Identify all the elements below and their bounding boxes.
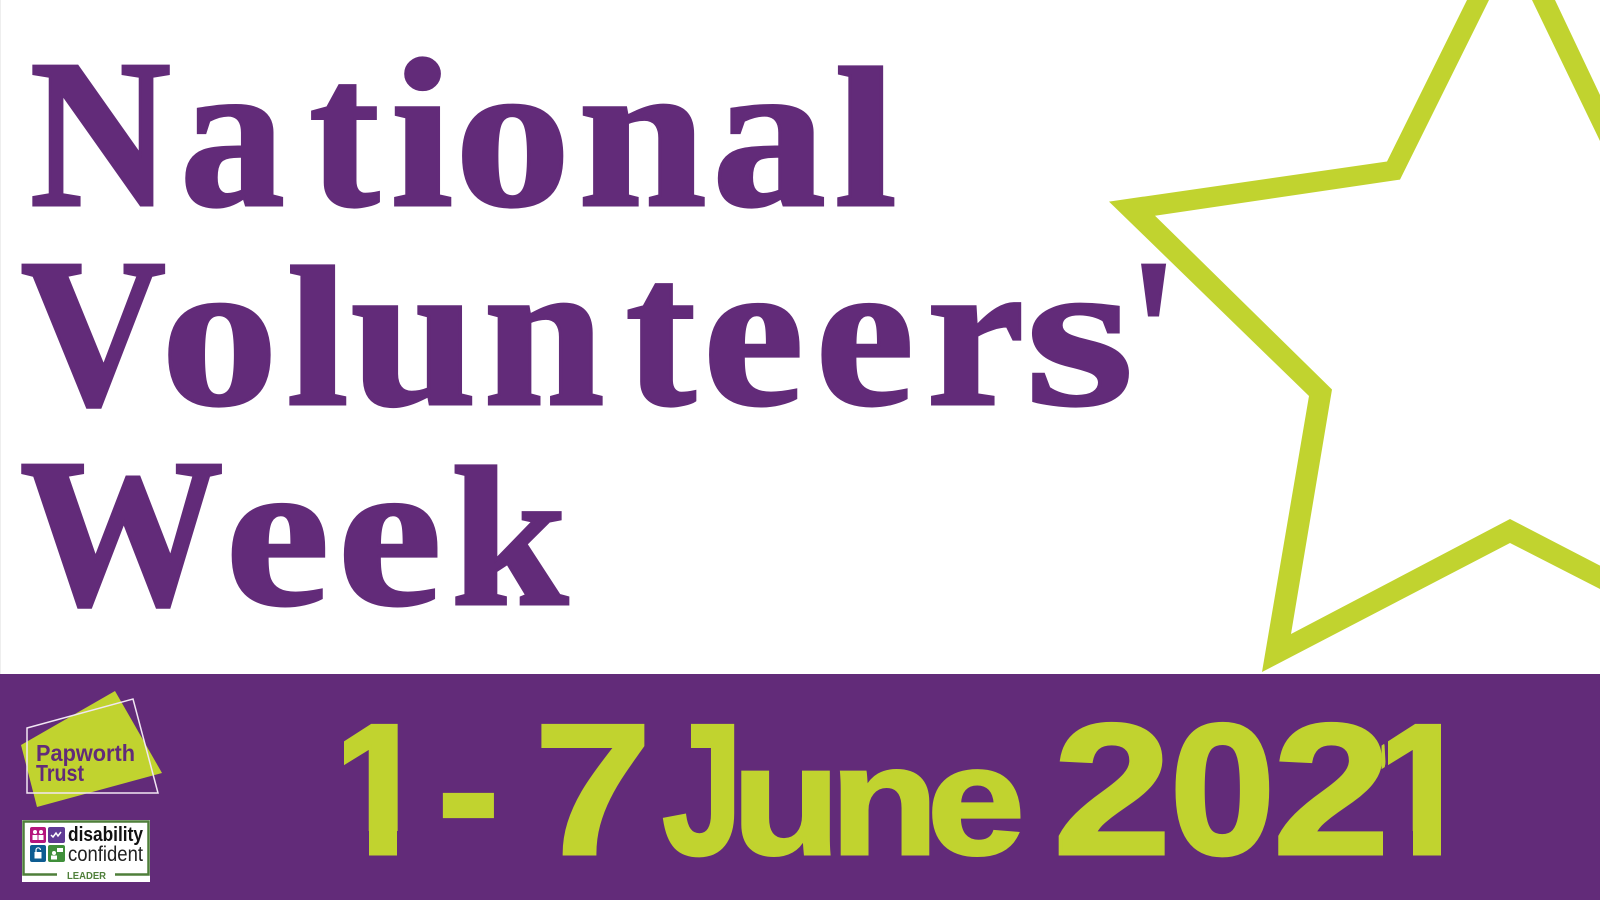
purple date banner bbox=[0, 674, 1600, 900]
title line: Volunteers': u bbox=[351, 215, 477, 450]
title line: Volunteers': e bbox=[703, 215, 804, 450]
title line: National: o bbox=[455, 16, 570, 251]
date part: June: J bbox=[662, 685, 743, 894]
title line: National: n bbox=[578, 16, 707, 251]
title line: National: i bbox=[391, 16, 453, 251]
title line: Volunteers': V bbox=[21, 215, 166, 450]
badge text: confident: confident bbox=[68, 843, 143, 866]
icon: outlined lime star bbox=[1109, 0, 1600, 672]
date part: 1 - 7: 7 bbox=[534, 685, 652, 894]
date part: June: n bbox=[830, 714, 939, 887]
date part: June: e bbox=[927, 714, 1025, 887]
date part: 2021: 2 bbox=[1053, 685, 1172, 894]
title: National Volunteers' Week bbox=[20, 16, 1178, 650]
icon: ticks bbox=[48, 827, 65, 843]
title line: Volunteers': t bbox=[626, 215, 696, 450]
title line: National: a bbox=[712, 16, 826, 251]
date part: 1 - 7: 1 bbox=[326, 685, 431, 894]
icon: person with speech bubble bbox=[48, 845, 65, 862]
badge: disability confident leader bbox=[22, 820, 150, 882]
date part: June: u bbox=[732, 714, 840, 887]
date part: 2021: 0 bbox=[1170, 685, 1276, 894]
logo: Papworth Trust bbox=[21, 691, 162, 807]
icon: people bbox=[30, 827, 46, 843]
icon: padlock bbox=[30, 845, 46, 862]
title line: Volunteers': n bbox=[484, 215, 604, 450]
title line: National: N bbox=[30, 16, 171, 251]
title line: Week: k bbox=[451, 428, 568, 648]
title line: National: a bbox=[180, 16, 285, 251]
title line: Volunteers': e bbox=[815, 215, 914, 450]
title line: Volunteers': r bbox=[927, 215, 1024, 450]
date part: 1 - 7: - bbox=[437, 685, 500, 894]
badge text: disability: disability bbox=[68, 824, 144, 846]
title line: Volunteers': o bbox=[161, 215, 278, 450]
title line: Week: e bbox=[225, 415, 330, 650]
title line: Volunteers': ' bbox=[1129, 215, 1178, 450]
title line: Week: e bbox=[338, 415, 442, 650]
title line: Volunteers': l bbox=[287, 228, 348, 448]
date: 1 - 7 June 2021 bbox=[344, 722, 1441, 858]
title line: Week: W bbox=[20, 415, 224, 650]
title line: National: l bbox=[835, 29, 896, 249]
logo text: Papworth: Papworth bbox=[36, 740, 135, 766]
date part: 2021: 1 bbox=[1370, 685, 1475, 894]
badge text: LEADER: LEADER bbox=[67, 870, 106, 882]
logo text: Trust: Trust bbox=[36, 760, 84, 786]
date part: 2021: 2 bbox=[1273, 685, 1391, 894]
title line: Volunteers': s bbox=[1026, 215, 1134, 450]
title line: National: t bbox=[309, 16, 379, 251]
